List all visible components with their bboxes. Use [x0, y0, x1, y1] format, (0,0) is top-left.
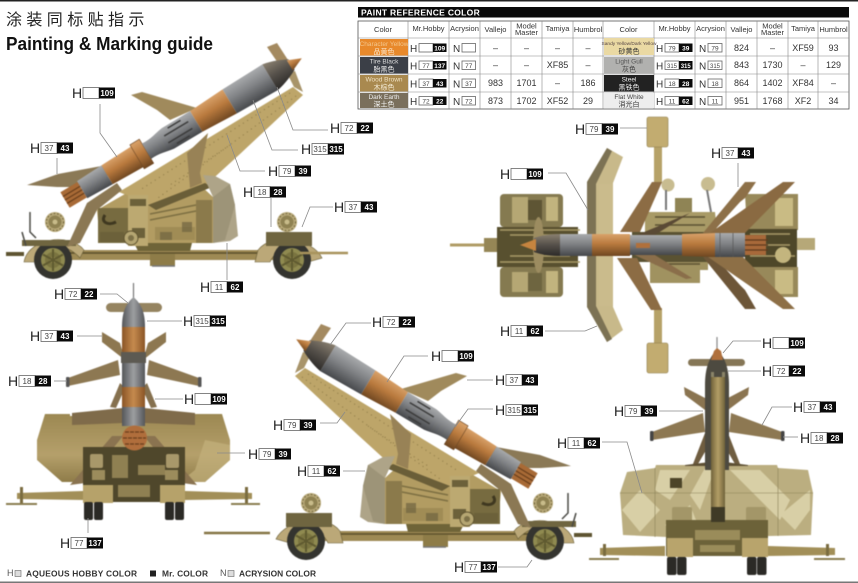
- callout: H 18 28: H: [243, 184, 253, 200]
- callout: H 315 315: 315: [211, 317, 225, 326]
- callout: H 72 22: [762, 363, 805, 379]
- color codes left: N: [453, 97, 460, 108]
- callout: H 18 28: 28: [39, 377, 48, 386]
- callout: H 315 315: 315: [313, 145, 327, 154]
- brand equivalents: XF85: [547, 60, 568, 70]
- callout: H 37 43: 43: [61, 144, 70, 153]
- callout: H 11 62: 62: [231, 283, 240, 292]
- callout: H 18 28: 18: [23, 377, 32, 386]
- callout: H 37 43: [711, 145, 754, 161]
- callout: H 11 62: [557, 435, 600, 451]
- color codes left: H: [410, 62, 417, 72]
- color swatches right: Sandy Yellow/Dark Yellow: [602, 41, 657, 47]
- panel: paint reference table: [358, 7, 849, 109]
- callout: H 37 43: H: [30, 140, 40, 156]
- color codes left: H: [410, 80, 417, 90]
- callout: H 109: 109: [100, 89, 114, 98]
- callout: H 72 22: H: [54, 286, 64, 302]
- callout: H 37 43: 37: [808, 403, 817, 412]
- callout: H 37 43: 43: [365, 203, 374, 212]
- callout: H 37 43: 43: [742, 149, 751, 158]
- brand equivalents: XF52: [547, 96, 568, 106]
- callout: H 11 62: H: [557, 435, 567, 451]
- callout: H 37 43: H: [711, 145, 721, 161]
- brand equivalents: 34: [828, 96, 839, 106]
- callout: H 315 315: 315: [523, 406, 537, 415]
- callout: H 77 137: [60, 535, 103, 551]
- brand equivalents: 93: [828, 43, 839, 53]
- color codes right: 11: [669, 98, 676, 106]
- callout: H 37 43: 43: [824, 403, 833, 412]
- color codes left: 109: [434, 46, 446, 52]
- color codes right: H: [656, 44, 663, 55]
- color swatches right: 消光白: [618, 100, 640, 108]
- callout: H 315 315: [301, 141, 344, 157]
- table column headers: Vallejo: [485, 25, 506, 34]
- callout: H 37 43: 37: [510, 376, 519, 385]
- brand equivalents: [488, 43, 841, 106]
- color codes left: 37: [465, 81, 473, 88]
- brand equivalents: 864: [734, 78, 749, 88]
- table column headers: Master: [761, 28, 784, 37]
- table column headers: [374, 22, 848, 37]
- callout: H 72 22: 22: [403, 318, 412, 327]
- callout: H 11 62: [500, 323, 543, 339]
- color codes left: 22: [436, 98, 444, 106]
- fins: [684, 387, 705, 410]
- color codes left: 77: [422, 63, 430, 70]
- color swatches right: 砂黄色: [618, 46, 640, 56]
- brand equivalents: 951: [734, 96, 749, 106]
- color swatches left: Wood Brown: [365, 76, 403, 84]
- callout: H 109: H: [72, 85, 82, 101]
- spools: [672, 507, 692, 527]
- illustration: side view, missile raised right: [6, 43, 348, 279]
- brand equivalents: 129: [826, 60, 841, 70]
- callout: H 72 22: H: [372, 314, 382, 330]
- callout: H 72 22: [330, 120, 373, 136]
- brand equivalents: XF59: [792, 43, 814, 53]
- callout: H 79 39: [614, 403, 657, 419]
- top border line: [0, 0, 858, 2]
- table column headers: Mr.Hobby: [658, 24, 691, 33]
- color codes right: 18: [711, 81, 719, 88]
- brand equivalents: XF2: [795, 96, 811, 106]
- callout: H 109: [72, 85, 115, 101]
- callout: H 37 43: H: [793, 399, 803, 415]
- callout: H 37 43: H: [495, 372, 505, 388]
- callout: H 315 315: [495, 402, 538, 418]
- legend: paint type key: N: [220, 568, 226, 578]
- callout: H 79 39: 39: [299, 167, 308, 176]
- callout: H 11 62: 11: [515, 327, 524, 336]
- support arms and feet: [17, 491, 252, 500]
- callout: H 18 28: 18: [258, 188, 267, 197]
- callout: H 79 39: H: [575, 121, 585, 137]
- shield: [587, 148, 623, 342]
- callout: H 79 39: H: [614, 403, 624, 419]
- color codes left: N: [453, 44, 460, 55]
- callout: H 79 39: 39: [645, 407, 654, 416]
- callout: H 77 137: 137: [88, 539, 102, 548]
- machinery: [83, 447, 185, 502]
- callout: H 37 43: [495, 372, 538, 388]
- callout: H 79 39: H: [248, 446, 258, 462]
- table column headers: Acrysion: [696, 24, 725, 33]
- brand equivalents: 1768: [762, 96, 783, 106]
- table column headers: Vallejo: [731, 25, 752, 34]
- callout: H 72 22: 72: [345, 124, 354, 133]
- legend: paint type key: ACRYSION COLOR: [239, 568, 316, 578]
- callout: H 109: H: [762, 335, 772, 351]
- color swatches right: Steel: [622, 76, 637, 84]
- callout: H 77 137: [454, 559, 497, 575]
- color codes right: 11: [712, 98, 719, 106]
- bottom border line: [0, 582, 858, 583]
- missile: [745, 235, 766, 255]
- callout: H 18 28: [243, 184, 286, 200]
- brand equivalents: –: [555, 43, 560, 53]
- callout: H 109: H: [500, 166, 510, 182]
- brand equivalents: XF84: [792, 78, 814, 88]
- table column headers: Color: [374, 25, 392, 34]
- leader lines: [54, 87, 798, 567]
- illustration: front view: [589, 337, 845, 575]
- callout: H 315 315: 315: [195, 317, 209, 326]
- color swatches left: 木棕色: [374, 82, 394, 92]
- callout: H 72 22: 72: [777, 367, 786, 376]
- callout: H 109: [500, 166, 543, 182]
- color codes right: [656, 44, 722, 108]
- illustration: top view: [450, 117, 815, 373]
- color swatches right: Light Gull: [615, 58, 643, 66]
- callout: H 37 43: [30, 328, 73, 344]
- callout: H 18 28: 18: [815, 434, 824, 443]
- callout: H 37 43: [793, 399, 836, 415]
- color codes right: N: [699, 97, 706, 108]
- callout: H 72 22: H: [762, 363, 772, 379]
- callout: H 79 39: 79: [288, 421, 297, 430]
- color swatches left: 胎黑色: [374, 64, 394, 74]
- color codes right: N: [699, 80, 706, 90]
- callout: H 109: [184, 391, 227, 407]
- callout: H 109: H: [431, 348, 441, 364]
- table column headers: Color: [620, 25, 638, 34]
- color codes right: 79: [668, 46, 676, 52]
- callout: H 79 39: 39: [279, 450, 288, 459]
- color codes left: 43: [436, 81, 444, 88]
- callout: H 315 315: H: [495, 402, 505, 418]
- color swatches right: Flat White: [614, 94, 644, 101]
- table column headers: Tamiya: [791, 24, 816, 33]
- table column headers: Humbrol: [574, 25, 603, 34]
- callout: H 11 62: 62: [531, 327, 540, 336]
- callout: H 37 43: [30, 140, 73, 156]
- color codes left: 37: [422, 81, 430, 88]
- callout: H 11 62: 11: [215, 283, 224, 292]
- callout: H 37 43: H: [334, 199, 344, 215]
- callout: H 37 43: H: [30, 328, 40, 344]
- missile: [132, 283, 134, 298]
- color codes left: 72: [422, 98, 430, 106]
- color codes right: H: [656, 97, 663, 108]
- color codes right: N: [699, 62, 706, 72]
- table column headers: Model: [516, 22, 537, 30]
- callout: H 11 62: 11: [312, 467, 321, 476]
- callout: H 11 62: H: [500, 323, 510, 339]
- large diagonal struts: [70, 436, 123, 485]
- brand equivalents: –: [585, 60, 591, 70]
- callout: H 11 62: [297, 463, 340, 479]
- color codes right: 62: [682, 98, 690, 106]
- legend: paint type key: H: [7, 568, 14, 578]
- callout: H 79 39: 79: [263, 450, 272, 459]
- callout: H 79 39: [273, 417, 316, 433]
- color codes right: 79: [711, 46, 719, 52]
- color swatches left: 深土色: [374, 100, 394, 108]
- table column headers: Mr.Hobby: [412, 24, 445, 33]
- fins: [620, 182, 662, 232]
- callout: H 72 22: 22: [361, 124, 370, 133]
- color swatches right: 黑铁色: [618, 82, 640, 92]
- table column headers: Model: [762, 22, 783, 30]
- callout: H 37 43: 37: [45, 332, 54, 341]
- color codes right: 315: [667, 64, 678, 70]
- callout: H 79 39: 79: [590, 125, 599, 134]
- brand equivalents: –: [493, 43, 498, 53]
- callout: H 72 22: [54, 286, 97, 302]
- brand equivalents: –: [555, 78, 560, 88]
- illustration: side view, missile raised left: [204, 324, 592, 560]
- wheel housings: [500, 194, 563, 227]
- callout: H 18 28: H: [8, 373, 18, 389]
- fins: [102, 332, 125, 360]
- callout: H 37 43: 37: [349, 203, 358, 212]
- callout: H 77 137: H: [60, 535, 70, 551]
- brand equivalents: 1730: [762, 60, 783, 70]
- callout: H 315 315: 315: [507, 406, 521, 415]
- callout: H 72 22: H: [330, 120, 340, 136]
- table heading bar: PAINT REFERENCE COLOR: [361, 8, 480, 18]
- callout: H 79 39: [575, 121, 618, 137]
- brand equivalents: –: [524, 60, 529, 70]
- arms and feet: [600, 546, 835, 556]
- color swatches left: [360, 39, 409, 108]
- callout: H 37 43: [334, 199, 377, 215]
- callout: H 79 39: [268, 163, 311, 179]
- callout: H 72 22: 22: [793, 367, 802, 376]
- callout: H 109: H: [184, 391, 194, 407]
- right housings: [745, 194, 798, 230]
- callout: H 72 22: [372, 314, 415, 330]
- legend: paint type key: AQUEOUS HOBBY COLOR: [26, 568, 137, 578]
- callout: H 79 39: 79: [629, 407, 638, 416]
- brand equivalents: –: [524, 43, 529, 53]
- legend: paint type key: [7, 568, 316, 578]
- shield: [37, 414, 230, 482]
- callout: H 11 62: 62: [588, 439, 597, 448]
- callout: H 79 39: 39: [304, 421, 313, 430]
- callout: H 18 28: [8, 373, 51, 389]
- callout: H 11 62: H: [200, 279, 210, 295]
- title: English heading: Painting & Marking guide: [6, 34, 213, 54]
- color codes right: N: [699, 44, 706, 55]
- brand equivalents: 1402: [762, 78, 783, 88]
- callout: H 18 28: 28: [831, 434, 840, 443]
- color codes left: 72: [465, 98, 473, 106]
- callout: H 109: 109: [790, 339, 804, 348]
- brand equivalents: 843: [734, 60, 749, 70]
- color codes left: N: [453, 80, 460, 90]
- callout: H 72 22: 72: [387, 318, 396, 327]
- callout: H 77 137: 77: [469, 563, 478, 572]
- table column headers: Master: [515, 28, 538, 37]
- brand equivalents: 824: [734, 43, 749, 53]
- color swatches right: [602, 38, 657, 108]
- color swatches left: Character Yellow: [360, 41, 409, 48]
- wheels: [667, 557, 676, 575]
- callout: H 37 43: 37: [726, 149, 735, 158]
- callout: H 79 39: H: [273, 417, 283, 433]
- callout: H 315 315: 315: [329, 145, 343, 154]
- shield: [620, 465, 813, 537]
- launcher arms: [654, 143, 662, 183]
- color swatches left: Dark Earth: [368, 94, 400, 101]
- callout: H 77 137: 137: [482, 563, 496, 572]
- brand equivalents: –: [493, 60, 498, 70]
- color swatches left: 品黄色: [374, 47, 394, 56]
- missile body and rail: [716, 337, 718, 352]
- brand equivalents: –: [770, 43, 775, 53]
- callout: H 79 39: 39: [606, 125, 615, 134]
- color codes right: 18: [668, 81, 676, 88]
- illustration: rear view: [6, 283, 260, 520]
- color codes right: 315: [681, 64, 691, 70]
- color codes left: [410, 44, 476, 108]
- color codes right: 28: [682, 81, 690, 88]
- color codes right: H: [656, 62, 663, 72]
- callout: H 72 22: 72: [69, 290, 78, 299]
- brand equivalents: 186: [580, 78, 596, 88]
- table column headers: Tamiya: [546, 24, 570, 33]
- callout: H 79 39: 79: [283, 167, 292, 176]
- callout: H 109: 109: [459, 352, 473, 361]
- callout: H 11 62: H: [297, 463, 307, 479]
- callout: H 315 315: H: [183, 313, 193, 329]
- brand equivalents: –: [831, 78, 836, 88]
- color codes right: 39: [682, 46, 690, 52]
- callout: H 37 43: 37: [45, 144, 54, 153]
- callout: H 18 28: [800, 430, 843, 446]
- brand equivalents: –: [585, 43, 591, 53]
- callout: H 18 28: H: [800, 430, 810, 446]
- brand equivalents: –: [800, 60, 806, 70]
- color codes left: 77: [465, 63, 473, 70]
- callout: H 18 28: 28: [274, 188, 283, 197]
- color swatches left: Tire Black: [370, 58, 399, 66]
- color codes left: H: [410, 97, 417, 108]
- camouflage bands: [622, 468, 810, 535]
- callout: H 77 137: H: [454, 559, 464, 575]
- title: Chinese heading: 涂装同标贴指示: [6, 11, 149, 29]
- color codes right: 315: [710, 64, 721, 70]
- color codes right: H: [656, 80, 663, 90]
- color swatches right: 灰色: [622, 64, 636, 74]
- color codes left: H: [410, 44, 417, 55]
- callout: H 315 315: [183, 313, 226, 329]
- callout: H 37 43: 43: [61, 332, 70, 341]
- callout: H 79 39: [248, 446, 291, 462]
- callout: H 109: [762, 335, 805, 351]
- table column headers: Acrysion: [450, 24, 479, 33]
- wheels: [84, 502, 93, 520]
- callout: H 109: 109: [212, 395, 226, 404]
- color codes left: 137: [434, 63, 446, 70]
- brand equivalents: 873: [488, 96, 503, 106]
- callout: H 109: [431, 348, 474, 364]
- callout: H 79 39: H: [268, 163, 278, 179]
- machinery: [666, 520, 768, 556]
- callout: H 11 62: 11: [572, 439, 581, 448]
- callout: H 72 22: 22: [85, 290, 94, 299]
- table column headers: Humbrol: [819, 25, 848, 34]
- brand equivalents: 983: [488, 78, 503, 88]
- callout: H 37 43: 43: [526, 376, 535, 385]
- callout: H 109: 109: [528, 170, 542, 179]
- legend: paint type key: Mr. COLOR: [162, 568, 208, 578]
- callout: H 315 315: H: [301, 141, 311, 157]
- brand equivalents: 1701: [516, 78, 537, 88]
- callout: H 11 62: [200, 279, 243, 295]
- machinery: [645, 212, 717, 232]
- color codes left: N: [453, 62, 460, 72]
- brand equivalents: 29: [583, 96, 593, 106]
- brand equivalents: 1702: [516, 96, 537, 106]
- callout: H 77 137: 77: [75, 539, 84, 548]
- callout: H 11 62: 62: [328, 467, 337, 476]
- table heading bar: [358, 7, 849, 18]
